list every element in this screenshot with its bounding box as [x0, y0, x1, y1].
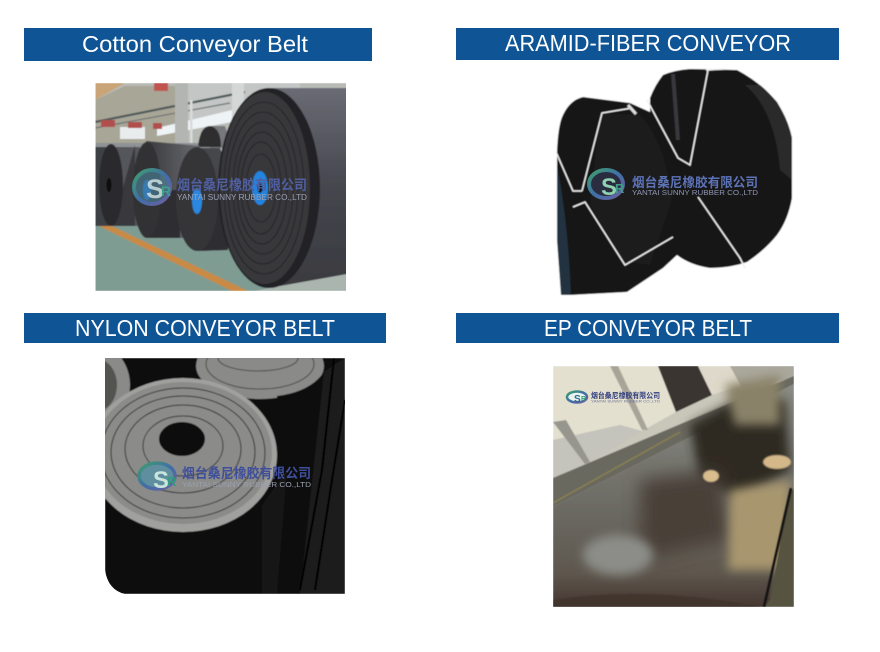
title: Aramid-Fiber Conveyor: ARAMID-FIBER CONVEYOR: [505, 30, 791, 56]
roll A: [95, 147, 110, 226]
photo: aramid-fiber conveyor belt rolls: [556, 68, 794, 301]
belt surface: [553, 384, 794, 607]
back small roll: [210, 126, 228, 149]
title: Nylon Conveyor Belt: [24, 313, 386, 343]
logo: cotton photo watermark: R: [161, 183, 171, 199]
photo: cotton conveyor belt rolls: [95, 83, 347, 291]
roll C: [201, 147, 222, 200]
logo: cotton photo watermark: [134, 170, 307, 204]
big roll: [269, 88, 347, 288]
logo: cotton photo watermark: S: [146, 174, 164, 204]
photo: EP conveyor belt sheet: [553, 366, 794, 607]
logo: nylon photo watermark: R: [167, 474, 177, 489]
logo: cotton photo watermark: YANTAI SUNNY RUBBER CO.,LTD: [177, 193, 307, 202]
logo: aramid photo watermark: 烟台桑尼橡胶有限公司: [632, 175, 758, 190]
title: EP Conveyor Belt: [456, 313, 839, 343]
logo: EP photo watermark: [567, 390, 661, 405]
logo: EP photo watermark: S: [574, 394, 581, 405]
logo: nylon photo watermark: S: [153, 467, 169, 494]
logo: aramid photo watermark: R: [615, 181, 625, 196]
title: Cotton Conveyor Belt: Cotton Conveyor Belt: [82, 31, 309, 57]
title: Aramid-Fiber Conveyor: [456, 28, 839, 60]
title: Nylon Conveyor Belt: NYLON CONVEYOR BELT: [75, 315, 335, 341]
logo: EP photo watermark: R: [581, 396, 586, 403]
logo: EP photo watermark: 烟台桑尼橡胶有限公司: [591, 390, 660, 400]
big roll: [124, 487, 275, 533]
title: EP Conveyor Belt: EP CONVEYOR BELT: [544, 315, 752, 341]
logo: cotton photo watermark: 烟台桑尼橡胶有限公司: [177, 177, 307, 193]
left top roll: [105, 358, 131, 413]
logo: aramid photo watermark: S: [601, 174, 617, 201]
belt edge: [764, 490, 794, 607]
roll B: [146, 141, 200, 238]
lower wall: [553, 425, 642, 478]
logo: nylon photo watermark: 烟台桑尼橡胶有限公司: [182, 465, 311, 481]
dark reflections: [690, 395, 790, 500]
cream wall: [553, 366, 676, 440]
title: Cotton Conveyor Belt: [24, 28, 372, 61]
logo: nylon photo watermark: [139, 463, 312, 494]
back right roll: [195, 358, 325, 400]
logo: aramid photo watermark: [589, 170, 759, 201]
dark doorway: [658, 366, 712, 412]
logo: EP photo watermark: YANTAI SUNNY RUBBER CO.,LTD: [591, 400, 661, 404]
belt edge band: [553, 376, 794, 507]
logo: aramid photo watermark: YANTAI SUNNY RUBBER CO.,LTD: [632, 188, 759, 197]
logo: nylon photo watermark: YANTAI SUNNY RUBBER CO.,LTD: [182, 480, 312, 489]
rolls silhouette: [557, 69, 792, 295]
straps: [556, 69, 745, 268]
photo: nylon conveyor belt rolls: [105, 358, 345, 594]
